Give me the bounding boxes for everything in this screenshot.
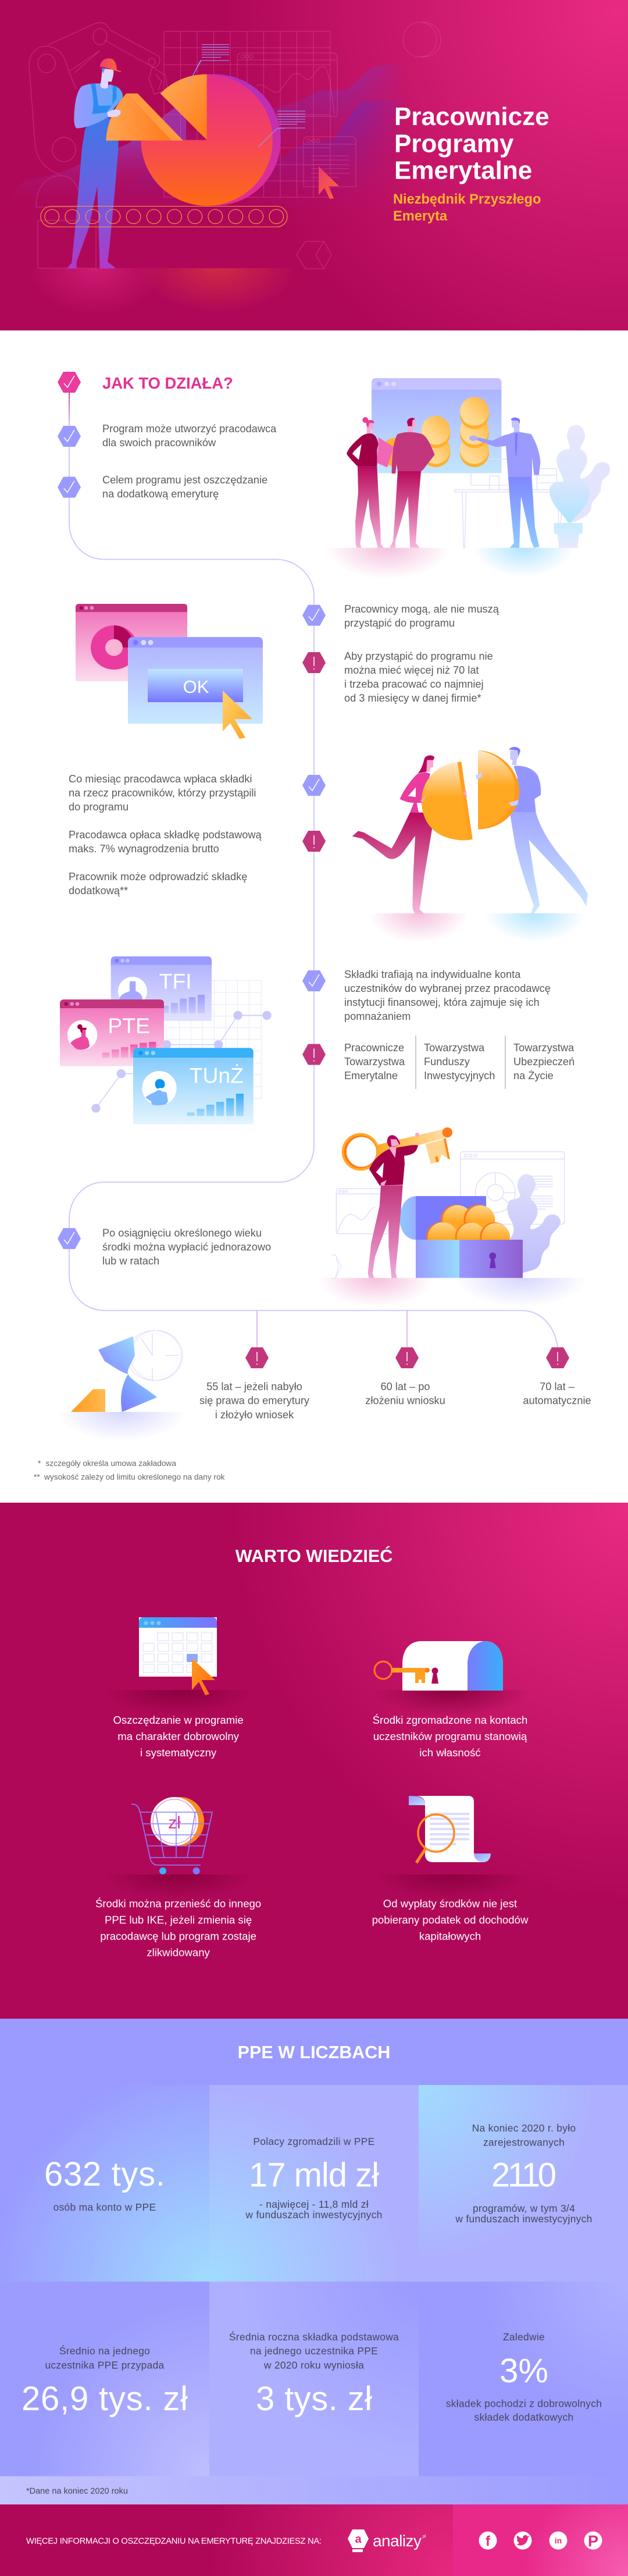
text: conditions: Aby przystąpić do programu nie [344,650,493,662]
stat cell: assets: 17 mld zł [249,2157,379,2194]
panel: hero header [0,0,628,361]
text: voluntary: i systematyczny [140,1746,217,1759]
icon: linkedin [549,2532,568,2549]
panel: footer [0,2504,628,2576]
subtitle: Emeryta [393,209,448,224]
text: conditions: od 3 miesięcy w danej firmie* [344,692,481,704]
text: basic contribution: maks. 7% wynagrodzenia brutto [69,843,219,855]
figure: woman [368,1133,419,1278]
figure: man in suit [469,418,540,548]
icon: facebook [479,2532,497,2549]
plant [507,1174,561,1273]
stat cell: additional share [419,2282,628,2476]
heading: JAK TO DZIAŁA? [102,374,233,392]
hourglass [98,1336,135,1374]
coin halves [422,750,519,840]
icon: exclamation hexagon [302,1044,326,1065]
window: TFI [111,956,212,1021]
stat cell: programmes: 2110 [491,2157,556,2194]
pie chart [141,61,285,206]
text: goal: na dodatkową emeryturę [102,488,219,500]
text: goal: Celem programu jest oszczędzanie [102,474,267,486]
icon: check hexagon [58,477,81,498]
text: additional contribution: Pracownik może odprowadzić składkę [69,871,247,883]
gold coins [426,1205,510,1253]
text: ownership: Środki zgromadzone na kontach [373,1714,527,1726]
window: PTE [60,999,164,1066]
icon: check hexagon [302,605,326,626]
text: conditions: można mieć więcej niż 70 lat [344,664,479,676]
held pie slice [126,94,183,141]
stat cell: assets [209,2085,419,2282]
shadows [100,1690,257,1744]
icon: exclamation hexagon 70 [546,1347,569,1368]
stat cell: assets: - najwięcej - 11,8 mld zł [259,2198,369,2210]
stat cell: assets: Polacy zgromadzili w PPE [253,2136,375,2147]
stat cell: programmes: programów, w tym 3/4 [473,2203,575,2214]
stat cell: annual contribution: na jednego uczestnika PPE [250,2345,378,2357]
footnotes: wysokość zależy od limitu określonego na dany rok [44,1473,225,1481]
text: monthly contributions: Co miesiąc pracodawca wpłaca składki [69,773,252,785]
icon: key and safe [374,1641,503,1691]
key [342,1127,452,1170]
text: transfer: PPE lub IKE, jeżeli zmienia się [105,1914,252,1926]
text: transfer: pracodawcę lub program zostaje [100,1930,256,1942]
text: individual accounts: instytucji finansowej, która zajmuje się ich [344,997,540,1008]
stat cell: assets: w funduszach inwestycyjnych [245,2209,383,2221]
window: PTE: PTE [108,1013,150,1038]
icon: exclamation hexagon 55 [245,1347,269,1368]
stat cell: people: osób ma konto w PPE [53,2201,156,2213]
icon: check hexagon [302,970,326,991]
logo: analizy.pl: analizy [373,2532,422,2550]
window: TUnŻ [133,1048,254,1125]
outline windows [331,1152,565,1278]
text: tax: Od wypłaty środków nie jest [383,1898,518,1910]
text: voluntary: Oszczędzanie w programie [113,1714,244,1726]
title: Pracownicze [394,102,550,131]
stat cell: people [0,2085,209,2282]
timeline line [69,393,558,1347]
figure: woman [352,755,434,915]
illustration: OK dialog windows [76,604,263,739]
conveyor belt [41,206,287,227]
figure: man [509,747,588,913]
chart grid [167,980,261,1098]
stat cell: average per participant: Średnio na jednego [59,2345,150,2357]
keyhole [489,1253,496,1268]
panel: how it works [0,330,628,1503]
stat cell: average per participant: 26,9 tys. zł [22,2380,188,2418]
icon: check hexagon [302,775,326,796]
text: monthly contributions: na rzecz pracowników, którzy przystąpili [69,787,256,799]
footnotes: szczegóły określa umowa zakładowa [45,1459,176,1468]
background mountains [19,63,401,197]
desk outline [455,459,571,548]
text: conditions: i trzeba pracować co najmniej [344,678,484,690]
text: institution 2: Funduszy [424,1056,470,1068]
icon: cursor arrow [319,166,339,199]
title: Programy [394,129,514,158]
panel: PPE in numbers [0,2019,628,2504]
logo: analizy.pl: a [355,2533,362,2546]
worker figure [67,58,183,269]
icon: exclamation hexagon 60 [395,1347,419,1368]
stat cell: average per participant [0,2282,209,2476]
stat cell: additional share: 3% [499,2352,548,2390]
nodes and lines [92,1011,271,1112]
clock [127,1330,183,1381]
text: voluntary: ma charakter dobrowolny [117,1730,240,1742]
text: institution 3: Ubezpieczeń [513,1056,575,1068]
illustration: two people holding coin halves [352,747,588,972]
figure: woman with folder [347,417,394,548]
coins [381,397,489,467]
text: ownership: uczestników programu stanowią [373,1730,527,1742]
text: institution 2: Towarzystwa [424,1042,485,1054]
footnotes: * [38,1459,41,1468]
text: transfer: zlikwidowany [147,1947,210,1959]
text: individual accounts: uczestników do wybranej przez pracodawcę [344,983,551,994]
text: employees may join: przystąpić do programu [344,617,455,629]
illustration: OK dialog windows: OK [183,677,209,697]
text: monthly contributions: do programu [69,801,129,813]
text: tax: pobierany podatek od dochodów [372,1914,529,1926]
caption: 55: się prawa do emerytury [199,1395,310,1407]
text: institution 2: Inwestycyjnych [424,1070,495,1081]
caption: 60: złożeniu wniosku [365,1395,445,1407]
text: institution 3: Towarzystwa [513,1042,575,1054]
stat cell: annual contribution: w 2020 roku wyniosła [263,2360,364,2371]
illustration: hourglass and clock [58,1330,186,1470]
icon: coin in shopping cart [131,1797,212,1874]
caption: 55: 55 lat – jeżeli nabyło [206,1381,302,1393]
stat cell: additional share: składek pochodzi z dobrowolnych [446,2398,602,2410]
text: institution 1: Pracownicze [344,1042,404,1054]
icon: exclamation hexagon [302,652,326,673]
stat cell: additional share: składek dodatkowych [474,2411,574,2423]
text: payout: środki można wypłacić jednorazowo [102,1241,271,1253]
icon: coin in shopping cart: zł [168,1813,181,1833]
text: payout: Po osiągnięciu określonego wieku [102,1227,262,1239]
illustration: TFI PTE TUnŻ windows [60,956,271,1125]
orange triangle [71,1389,105,1412]
text: ownership: ich własność [419,1746,481,1759]
footer call to action: WIĘCEJ INFORMACJI O OSZCZĘDZANIU NA EMERYTURĘ ZNAJDZIESZ NA: [26,2536,322,2546]
text: employees may join: Pracownicy mogą, ale nie muszą [344,603,499,615]
icon: check hexagon [58,1228,81,1249]
text: payout: lub w ratach [102,1255,159,1267]
icon: twitter [514,2532,531,2549]
icon: linkedin: in [555,2536,562,2545]
text: individual accounts: Składki trafiają na indywidualne konta [344,969,521,980]
heading: WARTO WIEDZIEĆ [236,1545,392,1566]
caption: 70: automatycznie [523,1395,591,1407]
heading: PPE W LICZBACH [238,2043,390,2062]
caption: 70: 70 lat – [540,1381,575,1393]
text: individual accounts: pomnażaniem [344,1011,411,1022]
outline machinery [29,22,441,269]
stat cell: additional share: Zaledwie [503,2331,545,2343]
stat cell: programmes: w funduszach inwestycyjnych [455,2213,593,2225]
stat cell: annual contribution [209,2282,419,2476]
logo: analizy.pl: pl [423,2535,426,2539]
text: tax: kapitałowych [419,1930,481,1942]
icon: exclamation hexagon [302,831,326,852]
illustration: woman with key and treasure chest [318,1127,587,1336]
icon: scroll with magnifier [409,1796,491,1863]
stat cell: annual contribution: Średnia roczna składka podstawowa [229,2331,399,2343]
stat cell: programmes [419,2085,628,2282]
text: basic contribution: Pracodawca opłaca składkę podstawową [69,829,262,841]
icon: pinterest: P [588,2532,598,2550]
pie slice: upper wedge [160,74,207,140]
data footnote: *Dane na koniec 2020 roku [26,2487,128,2496]
blue annotation lines [188,44,305,128]
window: TFI: TFI [159,969,192,993]
stat cell: average per participant: uczestnika PPE przypada [45,2360,165,2371]
footnotes: ** [34,1473,40,1481]
stat cell: annual contribution: 3 tys. zł [256,2380,372,2418]
logo: analizy.pl [348,2529,426,2552]
text: program: Program może utworzyć pracodawca [102,423,277,435]
icon: pinterest [584,2532,602,2550]
text: institution 1: Emerytalne [344,1070,398,1081]
caption: 60: 60 lat – po [381,1381,430,1393]
figure: man in pink [390,418,435,548]
stat cell: people: 632 tys. [44,2155,165,2193]
icon: facebook: f [486,2534,491,2549]
icon: cursor [223,691,252,739]
stat cell: programmes: zarejestrowanych [483,2136,565,2148]
plant [566,462,610,522]
text: institution 1: Towarzystwa [344,1056,405,1068]
icon: calendar [139,1617,217,1695]
OK button [148,669,243,702]
title: Emerytalne [394,156,532,184]
illustration: people and coins [326,378,610,610]
subtitle: Niezbędnik Przyszłego [393,192,541,207]
icon: check hexagon [58,426,81,447]
icon: pink check hexagon [58,372,81,393]
ground glows [29,268,163,361]
caption: 55: i złożyło wniosek [215,1409,294,1421]
text: institution 3: na Życie [513,1070,554,1081]
window: TUnŻ: TUnŻ [190,1063,244,1088]
chest lid [399,1196,416,1240]
text: additional contribution: dodatkową** [69,885,128,896]
chest base [416,1240,459,1278]
text: transfer: Środki można przenieść do innego [95,1898,261,1910]
text: program: dla swoich pracowników [102,437,216,449]
stat cell: programmes: Na koniec 2020 r. było [472,2122,576,2134]
panel: worth knowing [0,1503,628,2019]
data footnote [0,2476,628,2504]
